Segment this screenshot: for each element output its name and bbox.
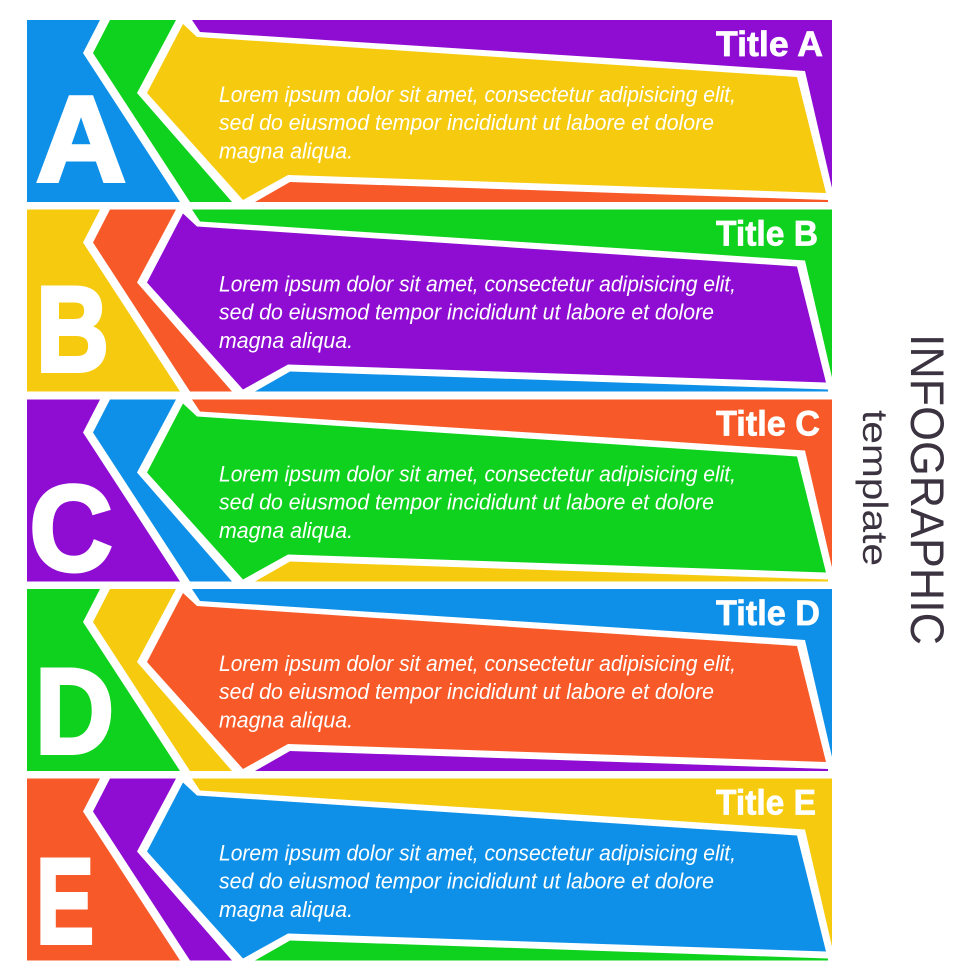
subheading: template: template	[855, 410, 894, 566]
body text E: sed do eiusmod tempor incididunt ut labore et dolore	[219, 868, 714, 894]
letter tab A	[27, 20, 180, 202]
body text E: Lorem ipsum dolor sit amet, consectetur adipisicing elit,	[219, 840, 736, 866]
bottom strip E	[255, 940, 828, 960]
body text E: magna aliqua.	[219, 897, 353, 922]
main panel B	[147, 214, 826, 390]
title band A	[192, 20, 832, 188]
letter tab B	[27, 210, 180, 392]
body text B: sed do eiusmod tempor incididunt ut labore et dolore	[219, 300, 714, 324]
title B: Title B	[716, 214, 818, 254]
title band C	[192, 400, 832, 568]
main panel E	[147, 782, 826, 958]
letter tab C	[27, 400, 180, 582]
body text D: magna aliqua.	[219, 708, 353, 732]
letter A: A	[36, 71, 126, 207]
title C: Title C	[716, 404, 820, 444]
main panel A	[147, 24, 826, 200]
bottom strip C	[255, 562, 828, 582]
chevron band C	[93, 400, 232, 582]
panel: row E	[27, 778, 832, 969]
panel: row D	[27, 589, 832, 779]
body text A: sed do eiusmod tempor incididunt ut labore et dolore	[219, 110, 714, 135]
chevron band D	[93, 589, 232, 771]
body text B: magna aliqua.	[219, 328, 353, 353]
letter tab D	[27, 589, 180, 771]
bottom strip D	[255, 751, 828, 771]
chevron band B	[93, 210, 232, 392]
letter E: E	[36, 833, 94, 969]
title E: Title E	[716, 784, 816, 822]
body text C: Lorem ipsum dolor sit amet, consectetur adipisicing elit,	[219, 462, 736, 486]
title band B	[192, 210, 832, 378]
letter D: D	[35, 643, 114, 779]
body text B: Lorem ipsum dolor sit amet, consectetur adipisicing elit,	[219, 272, 736, 296]
letter tab E	[27, 778, 180, 960]
bottom strip A	[255, 182, 828, 202]
panel: row B	[27, 210, 832, 397]
panel: row C	[27, 400, 832, 596]
title D: Title D	[716, 594, 820, 633]
bottom strip B	[255, 372, 828, 392]
title band E	[192, 778, 832, 946]
chevron band A	[93, 20, 232, 202]
body text A: magna aliqua.	[219, 138, 353, 164]
body text D: Lorem ipsum dolor sit amet, consectetur adipisicing elit,	[219, 651, 736, 676]
body text D: sed do eiusmod tempor incididunt ut labore et dolore	[219, 679, 714, 704]
main panel C	[147, 404, 826, 580]
letter C: C	[30, 460, 112, 596]
heading: INFOGRAPHIC: INFOGRAPHIC	[901, 334, 954, 645]
chevron band E	[93, 778, 232, 960]
title band D	[192, 589, 832, 757]
body text A: Lorem ipsum dolor sit amet, consectetur adipisicing elit,	[219, 82, 736, 107]
body text C: magna aliqua.	[219, 518, 353, 543]
title A: Title A	[716, 25, 823, 64]
letter B: B	[36, 261, 109, 397]
body text C: sed do eiusmod tempor incididunt ut labore et dolore	[219, 490, 714, 514]
panel: row A	[27, 20, 832, 207]
main panel D	[147, 593, 826, 769]
